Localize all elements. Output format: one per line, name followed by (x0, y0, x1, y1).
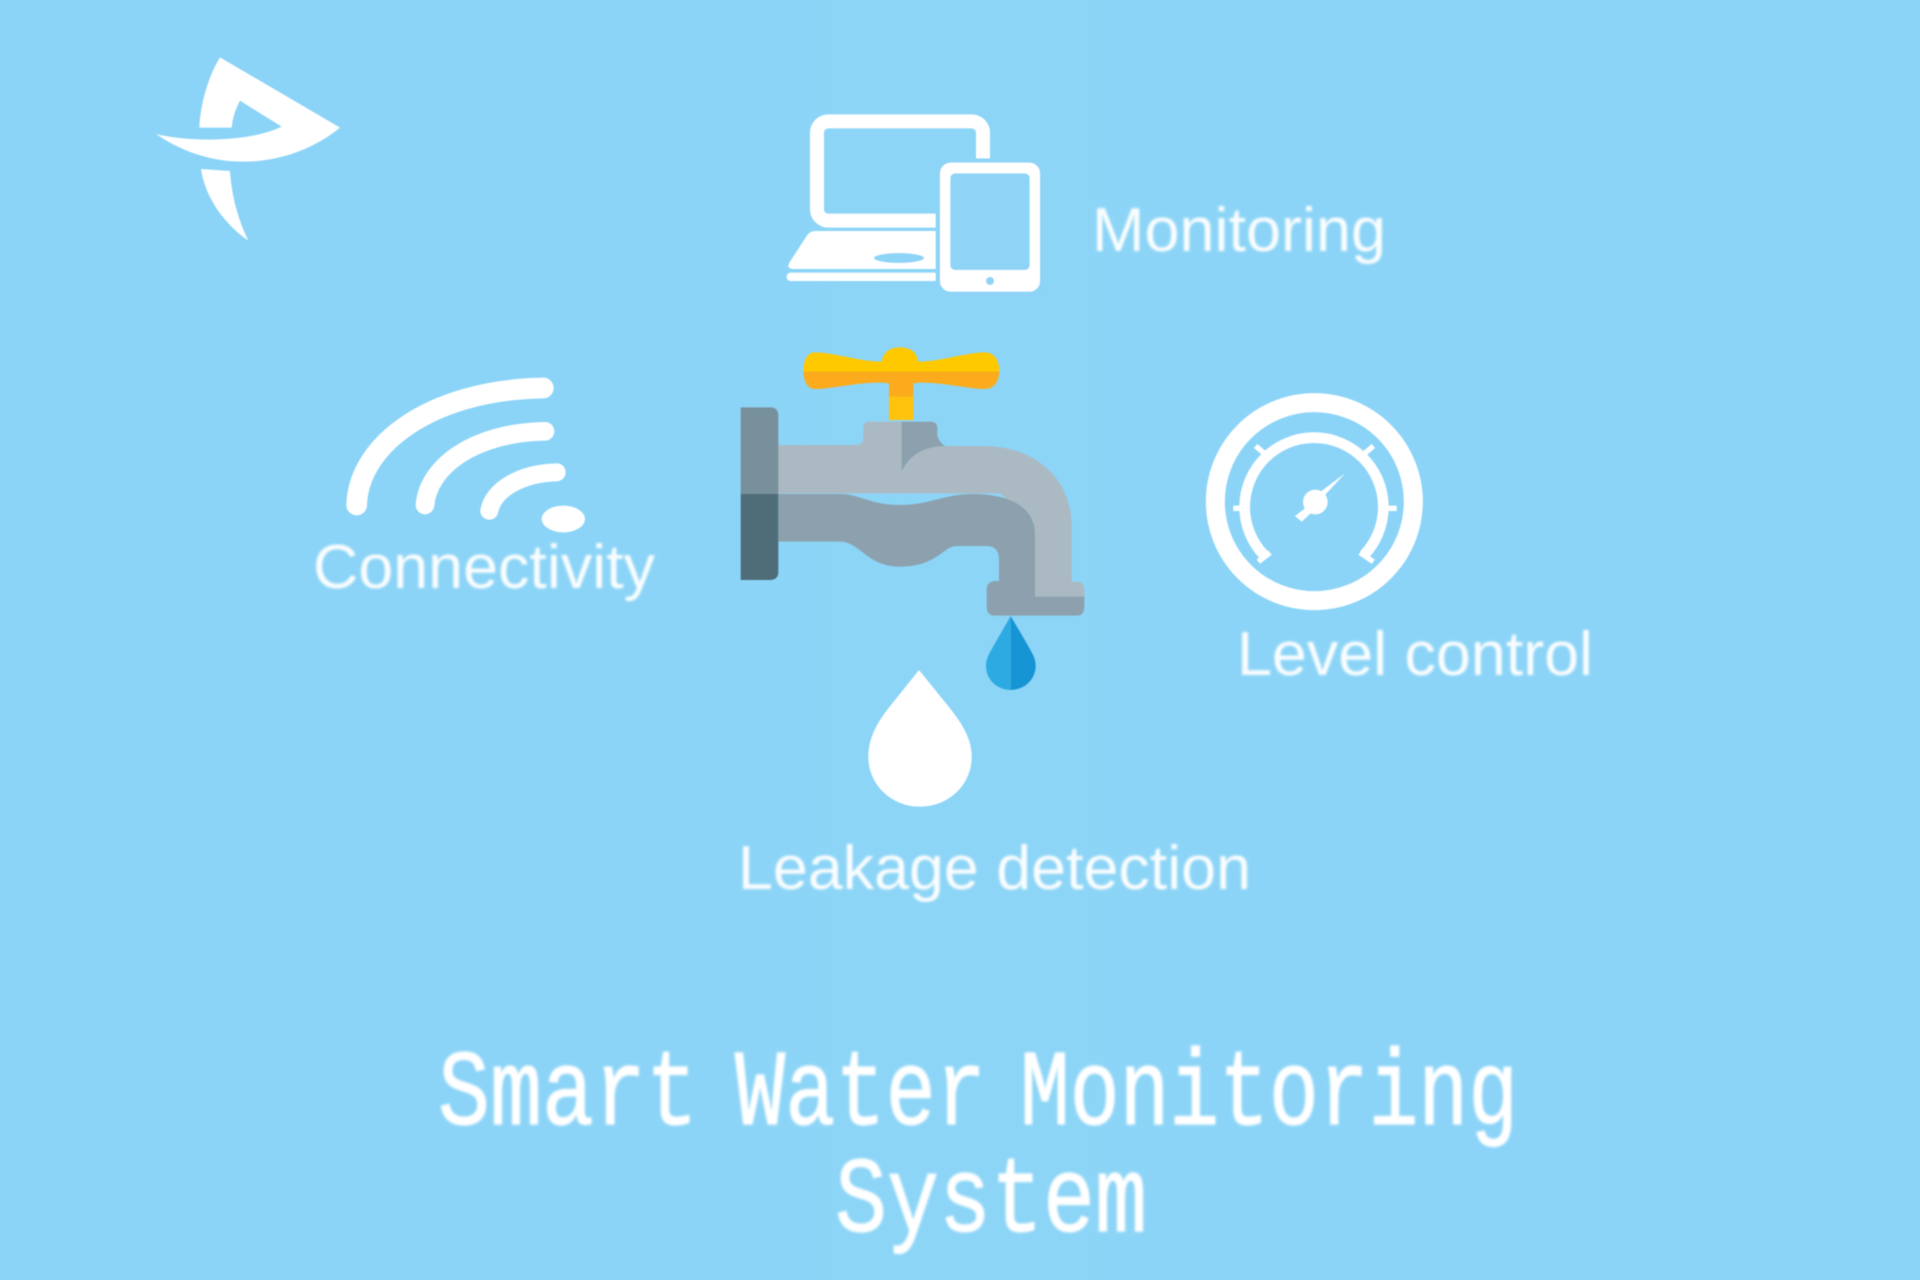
faucet handle (803, 347, 999, 420)
icon: water faucet (741, 347, 1084, 690)
title (438, 1035, 1518, 1264)
label: Monitoring: Monitoring (1092, 196, 1386, 265)
logo (156, 57, 340, 241)
icon: wifi signal (357, 388, 585, 532)
faucet body light (778, 422, 1084, 600)
title: System (835, 1142, 1147, 1264)
faucet neck shade (900, 422, 945, 473)
label: Connectivity: Connectivity (313, 533, 655, 602)
title: Smart (438, 1035, 698, 1157)
blue water drop (986, 616, 1011, 690)
title: Water (735, 1035, 986, 1157)
icon: laptop and tablet (787, 121, 1040, 292)
faucet body dark (778, 494, 1084, 616)
title: Monitoring (1020, 1035, 1518, 1157)
label: Leakage detection: Leakage detection (738, 834, 1251, 903)
label: Level control: Level control (1237, 620, 1593, 689)
wall flange (741, 407, 778, 494)
icon: white leak drop (868, 670, 972, 807)
icon: level gauge (1215, 403, 1413, 601)
